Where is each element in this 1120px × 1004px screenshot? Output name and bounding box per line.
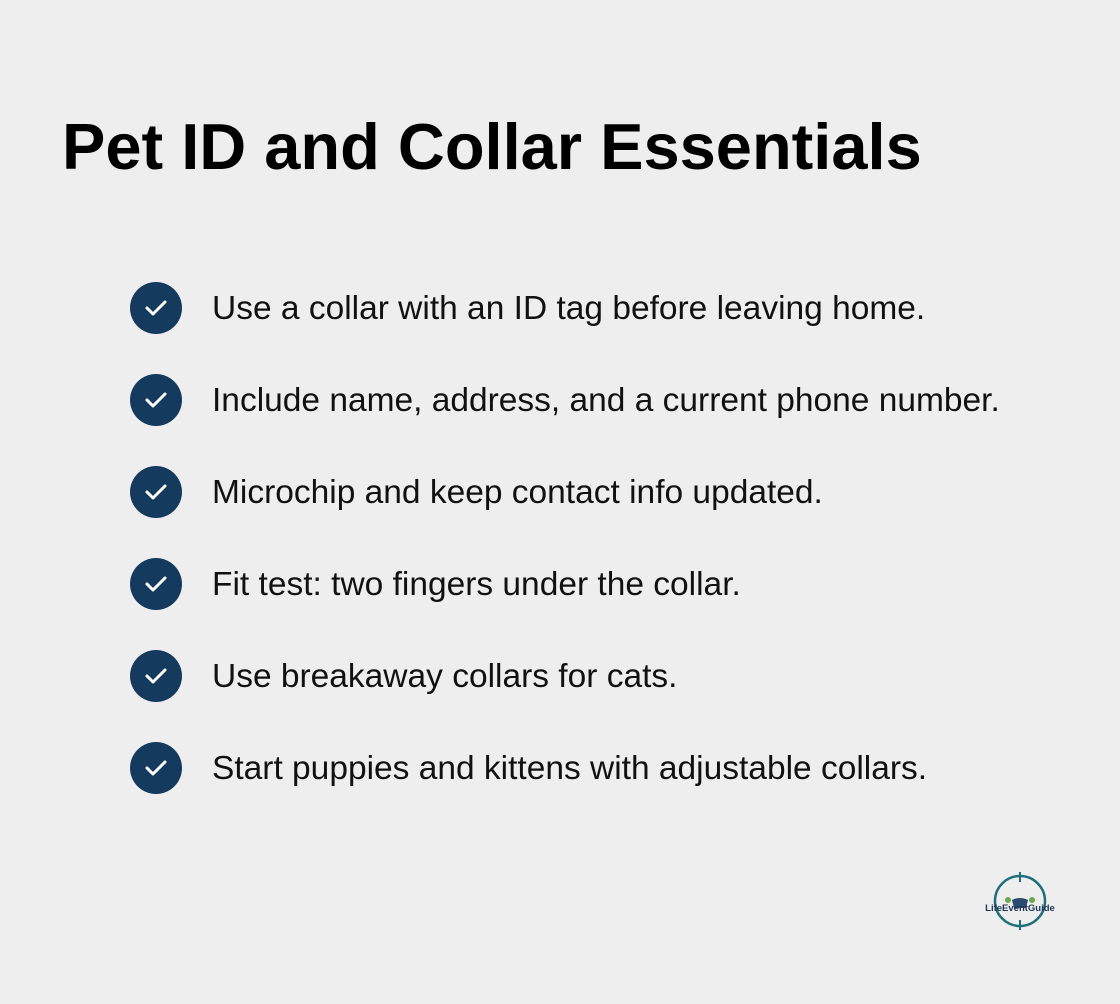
item 5: Use breakaway collars for cats. [212,658,677,695]
item 2: Include name, address, and a current phone number. [212,382,1000,419]
item 2 [130,374,1000,426]
logo [985,872,1055,930]
item 4: Fit test: two fingers under the collar. [212,566,741,603]
title: Pet ID and Collar Essentials [62,110,922,183]
item 3: Microchip and keep contact info updated. [212,474,823,511]
item 1 [130,282,925,334]
item 1: Use a collar with an ID tag before leaving home. [212,290,925,327]
item 6: Start puppies and kittens with adjustable collars. [212,750,927,787]
item 5 [130,650,677,702]
item 3 [130,466,823,518]
logo: LifeEventGuide [985,903,1055,914]
item 4 [130,558,741,610]
item 6 [130,742,927,794]
